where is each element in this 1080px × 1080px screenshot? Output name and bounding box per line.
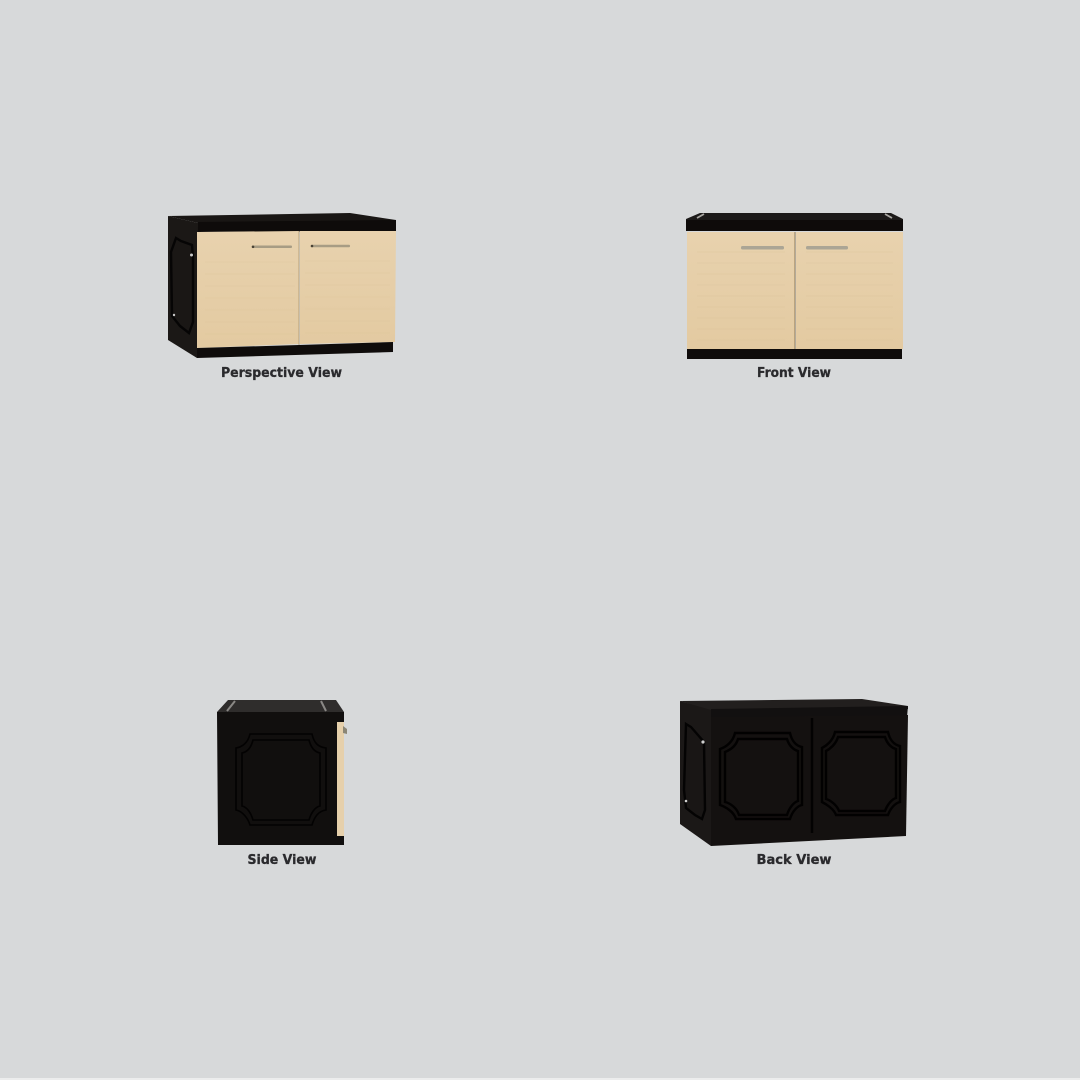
cabinet top <box>680 699 908 711</box>
cabinet top band <box>197 220 396 232</box>
cabinet front band <box>711 706 908 719</box>
right door <box>300 231 396 344</box>
base band <box>197 342 393 358</box>
door slats <box>205 261 390 334</box>
left side panel <box>168 216 198 358</box>
door slats <box>697 252 893 340</box>
panel: back view <box>680 699 908 868</box>
back face <box>711 715 908 846</box>
top corner strips <box>697 214 892 218</box>
cabinet top <box>686 213 903 222</box>
cabinet top band <box>686 220 903 231</box>
left raised panel <box>720 733 802 819</box>
right handle <box>311 245 350 247</box>
left handle <box>252 246 292 248</box>
left handle <box>741 246 784 250</box>
label: Front View <box>757 366 831 381</box>
door gap <box>298 231 300 345</box>
raised panel moulding <box>236 734 326 825</box>
right handle <box>806 246 848 250</box>
label: Perspective View <box>221 366 342 381</box>
handle nub <box>343 726 347 734</box>
cabinet top <box>217 700 344 712</box>
cabinet body <box>217 712 344 845</box>
cabinet top <box>168 213 396 223</box>
right door <box>796 232 903 349</box>
left door <box>687 232 795 349</box>
label: Side View <box>248 853 316 868</box>
left door <box>197 231 299 348</box>
label: Back View <box>756 853 832 868</box>
panel: front view <box>686 213 903 381</box>
top strips <box>227 701 326 711</box>
base band <box>687 349 902 359</box>
centre groove <box>811 718 813 833</box>
door gap <box>794 232 796 349</box>
panel: perspective view <box>168 213 396 381</box>
door edge <box>337 720 344 838</box>
panel: side view <box>217 700 347 868</box>
left side panel <box>680 701 711 846</box>
right raised panel <box>822 732 900 815</box>
